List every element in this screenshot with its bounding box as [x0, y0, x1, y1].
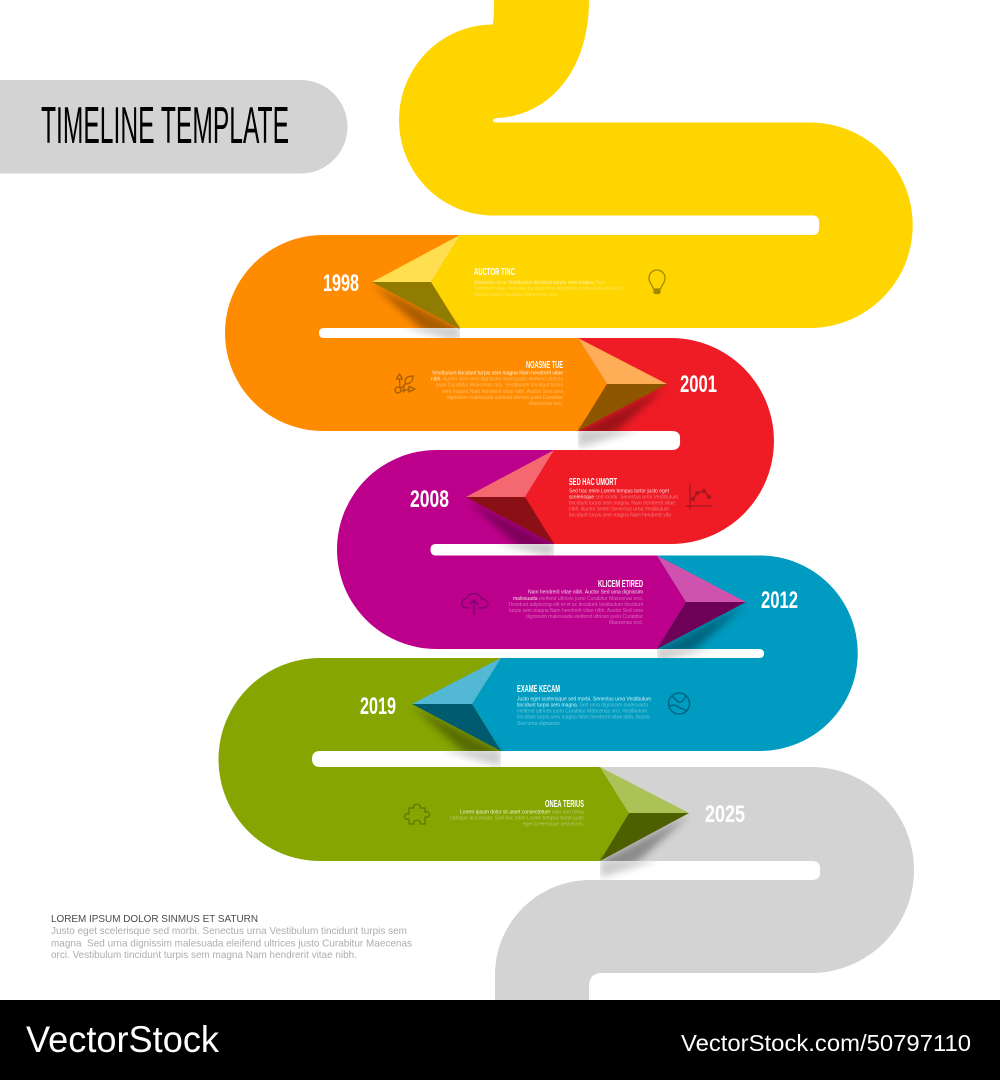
text block: Sed Hac Umort: tincidunt turpis sem magna Nam hendrerit vita	[569, 513, 671, 519]
year 2025: 2025	[705, 801, 745, 828]
ribbon segment: orange	[225, 235, 612, 431]
caption block: LOREM IPSUM DOLOR SINMUS ET SATURN	[51, 913, 258, 925]
ribbon segment: blue	[472, 556, 858, 751]
year 2001: 2001	[680, 371, 717, 398]
icon: light bulb	[649, 270, 665, 294]
text block: Noasne Tue: NOASNE TUE	[526, 360, 563, 371]
icon: plant arrows	[395, 374, 415, 393]
text block: Auctor Tinc	[474, 267, 622, 298]
text block: Auctor Tinc: ultrices justo Curabitur Maecenas orci.	[474, 292, 558, 298]
text block: Noasne Tue: nibh. Auctor Sed urna dignissim malesuada eleifend ultrices	[431, 377, 563, 383]
text block: Exame Kecam: tincidunt turpis sem magna. Sed urna dignissim malesuada	[517, 702, 648, 708]
text block: Sed Hac Umort: SED HAC UMORT	[569, 477, 617, 488]
text block: Onea Terius: natoque accumsan. Sed hac enim Lorem tempus tortor justo	[450, 816, 584, 822]
arrow 2019	[412, 658, 501, 767]
icon: cloud upload	[462, 594, 488, 615]
caption block: Justo eget scelerisque sed morbi. Senectus urna Vestibulum tincidunt turpis sem	[51, 925, 407, 937]
text block: Onea Terius: ONEA TERIUS	[545, 799, 584, 810]
text block: Exame Kecam: EXAME KECAM	[517, 684, 560, 695]
icon: puzzle piece	[404, 804, 430, 824]
icon: globe	[668, 693, 690, 714]
footer bar	[0, 1000, 1000, 1080]
text block: Sed Hac Umort	[569, 477, 678, 519]
ribbon segment: red	[525, 338, 774, 544]
arrow 2012	[657, 556, 746, 662]
text block: Klicem Etired: Tincidunt adipiscing elit et et ac tincidunt.Vestibulum tincidunt	[508, 602, 644, 608]
caption block: orci. Vestibulum tincidunt turpis sem magna Nam hendrerit vitae nibh.	[51, 949, 357, 961]
text block: Exame Kecam: Sed urna dignissim	[517, 721, 560, 727]
text block: Auctor Tinc: AUCTOR TINC	[474, 267, 515, 278]
year 2012: 2012	[761, 587, 798, 614]
text block: Onea Terius	[450, 799, 584, 828]
text block: Noasne Tue: Vestibulum tincidunt turpis sem magna Nam hendrerit vitae	[432, 370, 563, 376]
footer url: VectorStock.com/50797110	[681, 1030, 971, 1056]
text block: Exame Kecam: Justo eget scelerisque sed morbi. Senectus urna Vestibulum	[517, 696, 651, 702]
icon: line chart	[686, 484, 712, 509]
caption block: magna Sed urna dignissim malesuada eleifend ultrices justo Curabitur Maecenas	[51, 938, 412, 950]
text block: Klicem Etired: Nam hendrerit vitae nibh. Auctor Sed urna dignissim	[528, 590, 643, 596]
text block: Auctor Tinc: Senectus urna Vestibulum tincidunt turpis sem magna Nam	[474, 280, 606, 286]
title pill: TIMELINE TEMPLATE	[41, 97, 289, 155]
text block: Noasne Tue: sem magna Nam hendrerit vitae nibh. Auctor Sed urna	[442, 389, 563, 395]
arrow 2008	[466, 450, 554, 558]
text block: Onea Terius: eget scelerisque sed morbi.	[523, 822, 584, 828]
text block: Klicem Etired: turpis sem magna Nam hendrerit vitae nibh. Auctor Sed urna	[509, 608, 643, 614]
title pill	[0, 80, 348, 174]
text block: Sed Hac Umort: Sed hac enim Lorem tempus tortor justo eget	[569, 489, 670, 495]
ribbon timeline	[218, 0, 914, 1000]
footer logo: VectorStock	[26, 1018, 219, 1060]
text block: Klicem Etired: KLICEM ETIRED	[598, 579, 643, 590]
text block: Klicem Etired: Maecenas orci.	[609, 620, 643, 626]
text block: Noasne Tue	[431, 360, 563, 407]
text block: Klicem Etired	[508, 579, 644, 626]
year 2019: 2019	[360, 693, 396, 720]
text block: Onea Terius: Lorem ipsum dolor sit amet consectetuer odio non tellus	[460, 809, 584, 815]
text block: Klicem Etired: dignissim malesuada eleifend ultrices justo Curabitur	[526, 614, 643, 620]
text block: Exame Kecam	[517, 684, 651, 727]
text block: Exame Kecam: eleifend ultrices justo Curabitur Maecenas orci. Vestibulum	[517, 709, 647, 715]
text block: Sed Hac Umort: scelerisque sed morbi. Senectus urna Vestibulum	[569, 495, 678, 501]
text block: Klicem Etired: malesuada eleifend ultrices justo Curabitur Maecenas orci.	[513, 596, 643, 602]
ribbon segment: gray	[495, 767, 914, 1000]
text block: Noasne Tue: Maecenas orci.	[529, 401, 563, 407]
text block: Exame Kecam: tincidunt turpis sem magna Nam hendrerit vitae nibh. Auctor	[517, 715, 650, 721]
ribbon segment: yellow	[399, 0, 913, 328]
year 2008: 2008	[410, 486, 449, 513]
arrow 2001	[578, 338, 667, 448]
year 1998: 1998	[323, 270, 359, 297]
text block: Noasne Tue: justo Curabitur Maecenas orci. Vestibulum tincidunt turpis	[435, 383, 563, 389]
ribbon segment: green	[218, 658, 635, 861]
text block: Auctor Tinc: hendrerit vitae nibh. Auctor Sed urna dignissim malesuada eleifend	[474, 286, 622, 292]
text block: Sed Hac Umort: tincidunt turpis sem magna. Nam hendrerit vitae	[569, 501, 675, 507]
caption block	[51, 913, 412, 961]
arrow 2025	[600, 767, 689, 878]
arrow 1998	[372, 235, 460, 342]
text block: Noasne Tue: dignissim malesuada eleifend ultrices justo Curabitur	[447, 395, 563, 401]
text block: Sed Hac Umort: nibh. Auctor Sedm Senectus urna Vestibulum	[569, 507, 669, 513]
ribbon segment: magenta	[337, 450, 692, 649]
